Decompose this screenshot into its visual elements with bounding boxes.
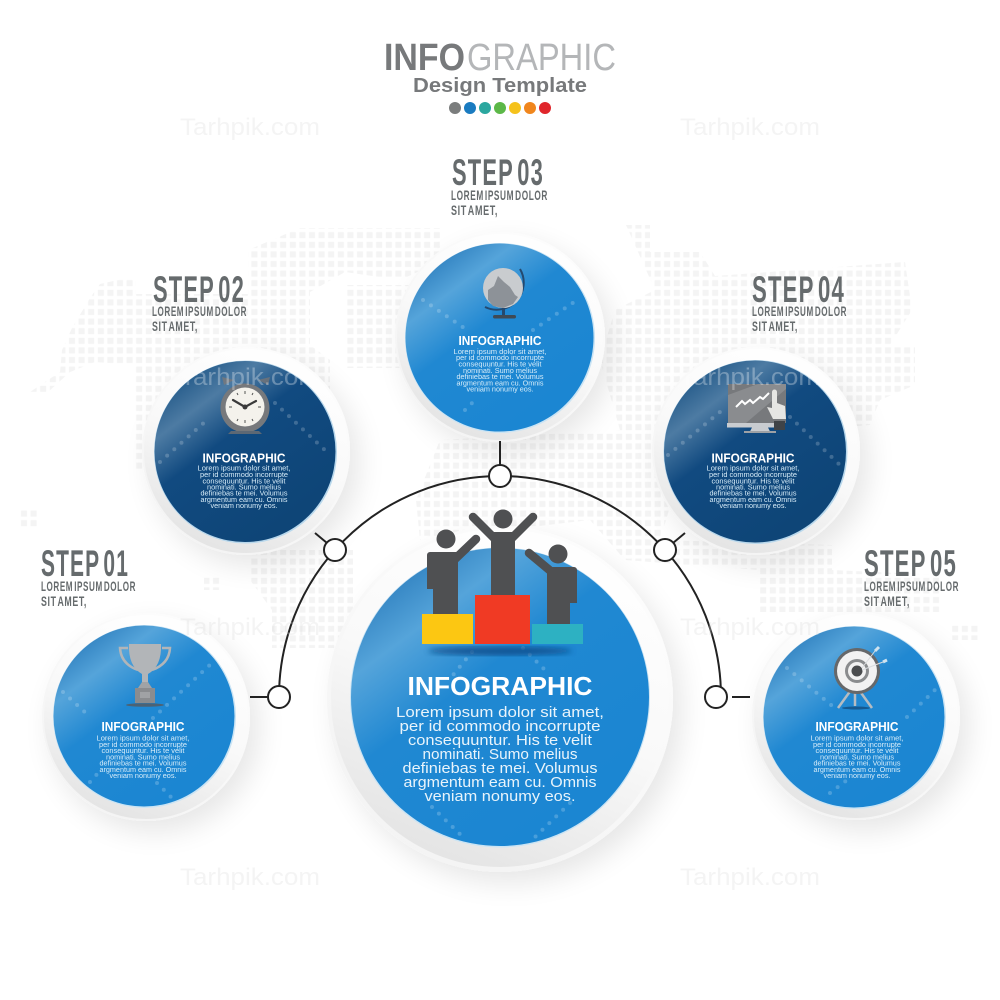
heading: INFOGRAPHIC xyxy=(102,719,185,734)
panel: step 05 circle xyxy=(752,612,960,820)
step 03 label: SIT AMET, xyxy=(451,202,498,218)
body text: argmentum eam cu. Omnis xyxy=(456,380,544,388)
body text: veniam nonumy eos. xyxy=(210,503,278,510)
body text xyxy=(706,466,800,510)
step 01 label: SIT AMET, xyxy=(41,593,87,609)
panel: step 01 circle xyxy=(42,613,250,821)
central heading: INFOGRAPHIC xyxy=(408,671,593,701)
body text: argmentum eam cu. Omnis xyxy=(200,497,288,504)
central body text: nominati. Sumo melius xyxy=(422,746,578,763)
central body text: definiebas te mei. Volumus xyxy=(402,760,598,777)
body text: definiebas te mei. Volumus xyxy=(200,490,288,498)
step 05 label: SIT AMET, xyxy=(864,593,910,609)
watermarks: Tarhpik.com xyxy=(180,364,320,391)
body text xyxy=(454,349,547,394)
background dotted world map xyxy=(21,225,977,648)
watermarks xyxy=(180,114,820,891)
body text: veniam nonumy eos. xyxy=(110,773,177,780)
subtitle: Design Template: Design Template xyxy=(413,75,587,97)
heading: INFOGRAPHIC xyxy=(712,450,795,466)
central body text: per id commodo incorrupte xyxy=(400,718,600,735)
body text: veniam nonumy eos. xyxy=(466,386,534,394)
body text: per id commodo incorrupte xyxy=(200,472,288,479)
body text: nominati. Sumo melius xyxy=(820,754,895,762)
step 03 label: STEP 03 xyxy=(452,152,544,193)
person left xyxy=(427,530,476,615)
body text: Lorem ipsum dolor sit amet, xyxy=(198,466,291,472)
icon: target with arrows xyxy=(834,647,887,710)
step 01 label xyxy=(41,543,136,609)
body text: nominati. Sumo melius xyxy=(106,754,181,762)
body text: Lorem ipsum dolor sit amet, xyxy=(454,349,547,356)
icon: trophy xyxy=(120,644,170,707)
step 03 label: LOREM IPSUM DOLOR xyxy=(451,187,548,203)
watermarks: Tarhpik.com xyxy=(680,614,820,641)
icon: globe xyxy=(483,268,524,318)
central body text: Lorem ipsum dolor sit amet, xyxy=(396,704,604,721)
podium xyxy=(422,595,583,644)
step 02 label xyxy=(152,269,247,334)
heading: INFOGRAPHIC xyxy=(458,333,542,348)
body text: Lorem ipsum dolor sit amet, xyxy=(706,466,800,472)
step 03 label xyxy=(451,152,548,218)
body text: veniam nonumy eos. xyxy=(824,773,891,780)
step 04 label xyxy=(752,269,847,334)
body text: definiebas te mei. Volumus xyxy=(710,490,797,498)
watermarks: Tarhpik.com xyxy=(680,364,820,391)
person right xyxy=(529,544,577,625)
body text: consequuntur. His te velit xyxy=(816,748,899,755)
watermarks: Tarhpik.com xyxy=(180,864,320,891)
step 02 label: STEP 02 xyxy=(153,269,245,310)
panel: step 02 circle xyxy=(142,347,350,555)
title: INFOGRAPHIC: GRAPHIC xyxy=(467,37,616,79)
body text: consequuntur. His te velit xyxy=(712,478,795,486)
body text: argmentum eam cu. Omnis xyxy=(710,497,797,504)
central body text: veniam nonumy eos. xyxy=(424,788,576,805)
body text: per id commodo incorrupte xyxy=(456,355,544,362)
icon: monitor with chart and hand xyxy=(727,384,786,433)
body text: argmentum eam cu. Omnis xyxy=(814,767,901,774)
central body text xyxy=(396,704,604,805)
body text xyxy=(96,736,190,780)
body text: Lorem ipsum dolor sit amet, xyxy=(810,736,904,742)
step 02 label: SIT AMET, xyxy=(152,318,198,334)
central body text: consequuntur. His te velit xyxy=(408,732,593,749)
body text: nominati. Sumo melius xyxy=(207,484,282,492)
watermarks: Tarhpik.com xyxy=(180,614,320,641)
watermarks: Tarhpik.com xyxy=(180,114,320,141)
person center xyxy=(473,510,533,596)
heading: INFOGRAPHIC xyxy=(816,719,899,734)
body text: nominati. Sumo melius xyxy=(463,368,538,375)
icon: people on podium xyxy=(422,510,583,656)
heading: INFOGRAPHIC xyxy=(202,450,286,466)
panel: step 04 circle xyxy=(652,347,860,555)
body text xyxy=(810,736,904,780)
panel: central circle xyxy=(327,526,673,872)
watermarks: Tarhpik.com xyxy=(680,864,820,891)
step 04 label: SIT AMET, xyxy=(752,318,798,334)
body text: definiebas te mei. Volumus xyxy=(456,374,544,381)
body text xyxy=(198,466,291,510)
step 01 label: LOREM IPSUM DOLOR xyxy=(41,578,136,594)
step 02 label: LOREM IPSUM DOLOR xyxy=(152,303,247,319)
title: INFOGRAPHIC: INFO xyxy=(384,37,465,79)
body text: definiebas te mei. Volumus xyxy=(100,760,187,768)
body text: consequuntur. His te velit xyxy=(202,478,286,486)
body text: per id commodo incorrupte xyxy=(99,742,187,749)
body text: consequuntur. His te velit xyxy=(102,748,185,755)
panel: step 03 circle xyxy=(395,232,605,442)
body text: consequuntur. His te velit xyxy=(458,362,542,368)
body text: per id commodo incorrupte xyxy=(813,742,901,749)
colour dots row xyxy=(449,102,551,114)
central body text: argmentum eam cu. Omnis xyxy=(404,774,596,791)
body text: definiebas te mei. Volumus xyxy=(814,760,901,768)
body text: nominati. Sumo melius xyxy=(716,484,791,492)
watermarks: Tarhpik.com xyxy=(680,114,820,141)
body text: per id commodo incorrupte xyxy=(709,472,797,479)
step 04 label: STEP 04 xyxy=(752,269,845,310)
body text: veniam nonumy eos. xyxy=(720,503,787,510)
body text: argmentum eam cu. Omnis xyxy=(100,767,187,774)
body text: Lorem ipsum dolor sit amet, xyxy=(96,736,190,742)
connector arc with nodes xyxy=(250,441,750,708)
step 04 label: LOREM IPSUM DOLOR xyxy=(752,303,847,319)
step 05 label xyxy=(864,543,959,609)
icon: alarm clock xyxy=(220,377,270,434)
title: INFOGRAPHIC xyxy=(384,37,616,79)
step 01 label: STEP 01 xyxy=(41,543,129,584)
